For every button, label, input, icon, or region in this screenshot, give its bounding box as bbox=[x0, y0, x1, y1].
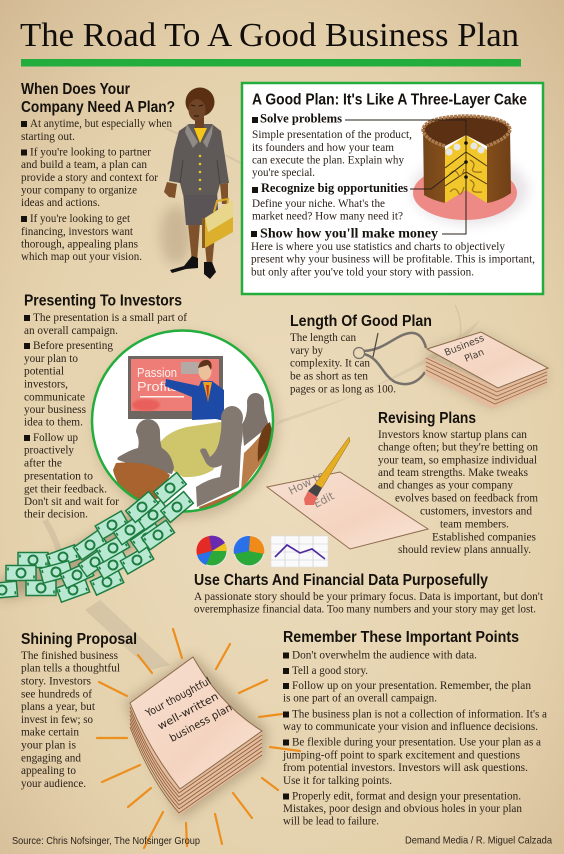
text: vary by bbox=[290, 344, 323, 357]
bullet list: Before presenting bbox=[33, 339, 113, 352]
illustration: businesswoman with briefcase bbox=[160, 88, 233, 279]
bullet list: proactively bbox=[24, 444, 74, 457]
heading: Revising Plans bbox=[378, 410, 476, 427]
panel: a good plan is like a three-layer cake bbox=[242, 83, 543, 294]
bullet list: Properly edit, format and design your presentation. bbox=[292, 789, 521, 802]
subheading with pointer: solve problems bbox=[252, 112, 468, 145]
bullet list: which map out your vision. bbox=[21, 250, 142, 263]
icon: three-layer cake bbox=[412, 116, 528, 224]
bullet list: thorough, appealing plans bbox=[21, 238, 138, 250]
panel: use charts and financial data purposefully bbox=[194, 536, 544, 616]
bullet list: ideas and actions. bbox=[21, 196, 100, 209]
text: recognize big opportunities bbox=[252, 197, 403, 223]
icon: business plan stack: Business bbox=[443, 333, 486, 359]
text bbox=[290, 331, 396, 396]
subheading with pointer: solve problems: Solve problems bbox=[260, 112, 342, 126]
icon: line chart bbox=[271, 536, 328, 567]
bullet list: Follow up on your presentation. Remember, the plan bbox=[292, 679, 531, 692]
text: customers, investors and bbox=[420, 505, 532, 518]
subheading with pointer: show how you'll make money bbox=[251, 175, 468, 242]
bullet list: At anytime, but especially when bbox=[30, 117, 172, 130]
text: see hundreds of bbox=[21, 687, 92, 700]
bullet list: Use it for talking points. bbox=[283, 774, 392, 787]
bullet list: jumping-off point to spark excitement and questions bbox=[282, 748, 520, 761]
text bbox=[194, 590, 544, 616]
text: recognize big opportunities: market need? How many need it? bbox=[252, 210, 403, 223]
road running through the background bbox=[45, 128, 480, 670]
illustration: note being edited with pencil: Edit bbox=[311, 489, 337, 511]
icon: business plan stack bbox=[425, 332, 548, 409]
bullet list: and build a team, a plan can bbox=[21, 158, 147, 171]
icon: calipers bbox=[354, 333, 426, 384]
heading: Length Of Good Plan bbox=[290, 313, 432, 330]
text: appealing to bbox=[21, 764, 76, 777]
text: plans a year, but bbox=[21, 700, 96, 713]
bullet list bbox=[21, 117, 172, 263]
panel heading: A Good Plan: It's Like A Three-Layer Cake bbox=[252, 92, 527, 108]
panel: when does your company need a plan bbox=[21, 81, 175, 263]
bullet list bbox=[282, 648, 547, 828]
illustration: shining business plan: Your thoughtful bbox=[143, 675, 213, 720]
text: story. Investors bbox=[21, 675, 91, 688]
panel: revising plans bbox=[378, 410, 538, 556]
illustration: shining business plan: well-written bbox=[156, 691, 221, 733]
bullet list: Don't overwhelm the audience with data. bbox=[292, 648, 477, 661]
bullet list: presentation to bbox=[24, 470, 93, 483]
text: A passionate story should be your primary focus. Data is important, but don't bbox=[194, 590, 544, 603]
heading: Presenting To Investors bbox=[24, 293, 182, 310]
bullet list: starting out. bbox=[21, 130, 75, 143]
bullet list: investors, bbox=[24, 377, 68, 390]
bullet list: potential bbox=[24, 365, 64, 378]
bullet list: Follow up bbox=[33, 431, 78, 444]
heading: Use Charts And Financial Data Purposefully bbox=[194, 572, 488, 589]
bullet list: your business bbox=[24, 403, 86, 416]
text: invest in few; so bbox=[21, 713, 93, 726]
bullet list: The presentation is a small part of bbox=[33, 311, 187, 324]
bullet list: Tell a good story. bbox=[292, 664, 368, 677]
heading bbox=[21, 81, 175, 116]
text: pages or as long as 100. bbox=[290, 383, 396, 396]
bullet list: If you're looking to partner bbox=[30, 146, 151, 158]
text bbox=[378, 428, 538, 556]
bullet list: provide a story and context for bbox=[21, 171, 158, 184]
panel: shining proposal bbox=[21, 631, 137, 790]
bullet list: idea to them. bbox=[24, 416, 83, 429]
illustration: note being edited with pencil: How to bbox=[286, 468, 327, 498]
bullet list: way to communicate your vision and influence decisions. bbox=[283, 720, 538, 733]
text: Investors know startup plans can bbox=[378, 428, 527, 441]
heading: Remember These Important Points bbox=[283, 629, 519, 646]
text: complexity. It can bbox=[290, 357, 370, 370]
heading: Company Need A Plan? bbox=[21, 99, 175, 116]
heading: When Does Your bbox=[21, 81, 130, 98]
illustration: presentation to investors in a circle: Profits bbox=[137, 379, 179, 394]
bullet list: communicate bbox=[24, 390, 85, 403]
bullet list: an overall campaign. bbox=[24, 324, 118, 337]
bullet list: Mistakes, poor design and obvious holes in your plan bbox=[283, 802, 522, 815]
bullet list: financing, investors want bbox=[21, 225, 134, 238]
text: should review plans annually. bbox=[398, 543, 531, 556]
text: show how you'll make money: Here is where you use statistics and charts to objectively bbox=[251, 240, 505, 253]
illustration: trail of green money bbox=[0, 473, 193, 602]
icon: pie chart one bbox=[196, 536, 227, 566]
text: and team strengths. Make tweaks bbox=[378, 466, 528, 479]
text: evolves based on feedback from bbox=[395, 492, 538, 505]
icon: business plan stack: Plan bbox=[463, 347, 486, 365]
text: solve problems: Simple presentation of the product, bbox=[252, 128, 412, 141]
text: solve problems: its founders and how your team bbox=[252, 141, 394, 154]
panel: remember these important points bbox=[282, 629, 547, 828]
illustration: presentation to investors in a circle: Passion bbox=[137, 365, 177, 380]
title: The Road To A Good Business Plan bbox=[20, 17, 519, 54]
bullet list: get their feedback. bbox=[24, 482, 107, 495]
text: show how you'll make money bbox=[251, 240, 535, 278]
text: be as short as ten bbox=[290, 370, 368, 383]
illustration: presentation to investors in a circle bbox=[92, 330, 278, 522]
text: The finished business bbox=[21, 649, 118, 662]
source credit: Source: Chris Nofsinger, The Nofsinger Group bbox=[12, 835, 200, 847]
illustration: shining business plan: business plan bbox=[168, 702, 234, 745]
bullet list bbox=[24, 311, 187, 521]
panel frame bbox=[242, 83, 543, 294]
text: your audience. bbox=[21, 777, 86, 790]
text: engaging and bbox=[21, 751, 81, 764]
text: your team, so emphasize individual bbox=[378, 453, 537, 466]
green title rule bbox=[21, 59, 521, 66]
bullet list: your company to organize bbox=[21, 184, 137, 197]
bullet list: after the bbox=[24, 457, 62, 470]
text: overemphasize financial data. Too many numbers and your story may get lost. bbox=[194, 603, 536, 616]
subheading with pointer: show how you'll make money: Show how you'll make money bbox=[260, 227, 438, 242]
text: solve problems bbox=[252, 128, 412, 179]
illustration: shining business plan bbox=[97, 629, 300, 848]
text: show how you'll make money: but only after you've told your story with passion. bbox=[251, 265, 474, 278]
text: recognize big opportunities: Define your niche. What's the bbox=[252, 197, 385, 210]
bullet list: your plan to bbox=[24, 352, 78, 365]
subheading with pointer: recognize big opportunities bbox=[252, 160, 468, 195]
bullet list: If you're looking to get bbox=[30, 212, 131, 225]
text: your plan is bbox=[21, 739, 76, 752]
text: show how you'll make money: present why your business will be profitable. This is important, bbox=[251, 253, 535, 266]
icon: orange shine rays bbox=[97, 629, 300, 848]
text: solve problems: can execute the plan. Explain why bbox=[252, 154, 404, 167]
bullet list: will be lead to failure. bbox=[283, 815, 379, 828]
text: change often; but they're betting on bbox=[378, 440, 538, 453]
text: team members. bbox=[440, 518, 509, 531]
text: Established companies bbox=[432, 530, 536, 543]
text: and changes as your company bbox=[378, 479, 513, 492]
text: make certain bbox=[21, 726, 79, 739]
icon: pie chart two bbox=[234, 536, 264, 566]
subheading with pointer: recognize big opportunities: Recognize big opportunities bbox=[261, 181, 408, 195]
bullet list: Be flexible during your presentation. Use your plan as a bbox=[292, 736, 541, 749]
text bbox=[21, 649, 120, 790]
illustration: note being edited with pencil bbox=[267, 437, 428, 549]
bullet list: from potential investors. Investors will ask questions. bbox=[283, 761, 528, 774]
text: solve problems: you're special. bbox=[252, 166, 315, 179]
bullet list: is one part of an overall campaign. bbox=[283, 692, 437, 705]
bullet list: Don't sit and wait for bbox=[24, 495, 119, 508]
panel: presenting to investors bbox=[24, 293, 187, 521]
heading: Shining Proposal bbox=[21, 631, 137, 648]
bullet list: The business plan is not a collection of information. It's a bbox=[292, 707, 547, 720]
text: plan tells a thoughtful bbox=[21, 662, 120, 675]
bullet list: their decision. bbox=[24, 508, 88, 521]
text: The length can bbox=[290, 331, 356, 344]
panel: length of good plan bbox=[290, 313, 432, 396]
